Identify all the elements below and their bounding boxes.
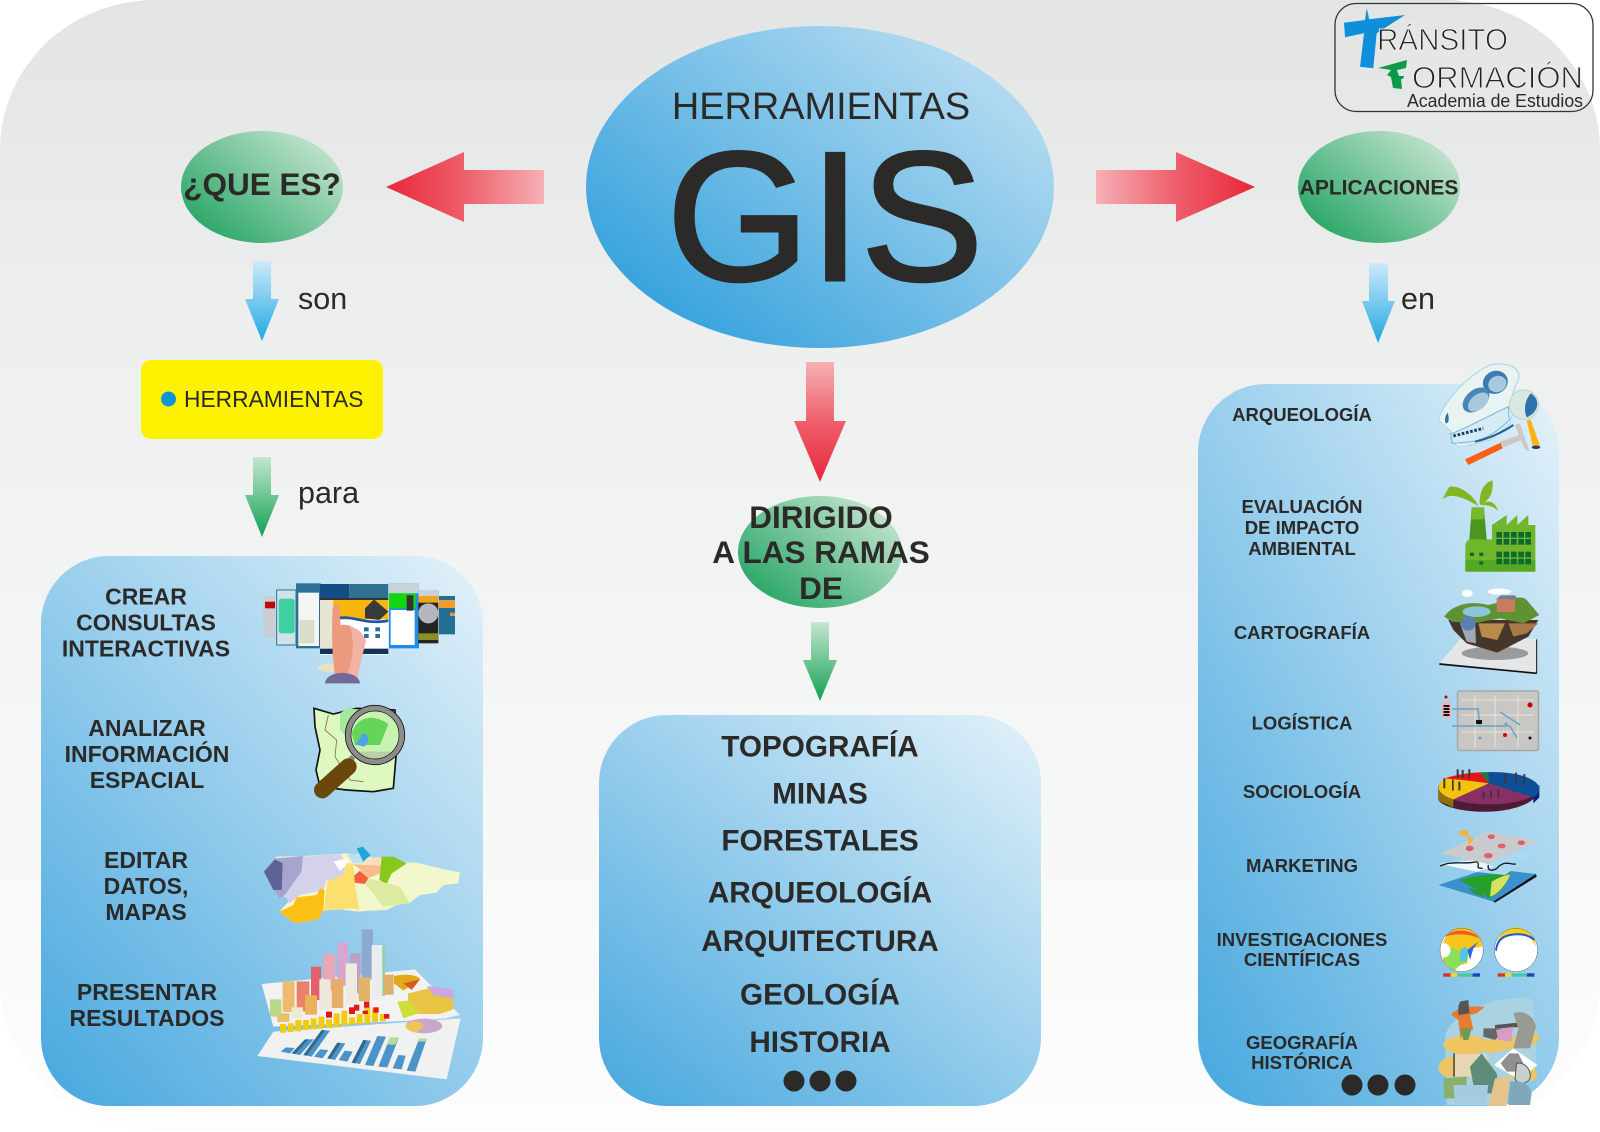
text: evaluación: DE IMPACTO	[1245, 517, 1359, 538]
text: analizar: ESPACIAL	[90, 767, 204, 793]
arrow: down from GIS	[794, 362, 846, 482]
text: analizar: INFORMACIÓN	[65, 740, 229, 767]
icon: 3D pie chart	[1438, 769, 1539, 812]
text: list of branches: GEOLOGÍA	[740, 978, 900, 1012]
text: list of branches: ARQUEOLOGÍA	[708, 876, 932, 910]
text: list of branches: ARQUITECTURA	[701, 925, 939, 958]
box: Herramientas	[141, 360, 383, 439]
text: list of branches: FORESTALES	[721, 824, 919, 858]
text: logística: LOGÍSTICA	[1252, 712, 1352, 734]
ellipse: Aplicaciones: APLICACIONES	[1300, 176, 1458, 200]
ellipse: Que es	[181, 131, 343, 243]
arrow: down to branches	[803, 622, 837, 701]
ellipse: Que es: ¿QUE ES?	[183, 166, 341, 202]
central ellipse: Herramientas GIS: HERRAMIENTAS	[672, 86, 970, 128]
icon: green factory	[1443, 481, 1535, 572]
ellipse: Aplicaciones	[1298, 131, 1460, 243]
arrow: son	[245, 261, 279, 341]
text: geografía: GEOGRAFÍA	[1246, 1032, 1358, 1053]
text: editar: MAPAS	[105, 899, 187, 925]
icon: map layers	[1438, 829, 1539, 903]
ellipse: dirigido a las ramas de: DE	[799, 570, 843, 606]
text: academia de estudios: Academia de Estudios	[1407, 90, 1583, 111]
text: list of branches: MINAS	[772, 778, 868, 810]
text: marketing: MARKETING	[1246, 855, 1358, 876]
text: crear consultas: CONSULTAS	[76, 610, 216, 636]
text: investigaciones: CIENTÍFICAS	[1244, 949, 1360, 970]
label: para: para	[298, 476, 359, 510]
icon: floating land	[1439, 589, 1539, 673]
text: list of branches: TOPOGRAFÍA	[721, 730, 919, 764]
text: evaluación: EVALUACIÓN	[1242, 496, 1362, 517]
dots: more applications	[1342, 1074, 1416, 1096]
text: sociología: SOCIOLOGÍA	[1243, 781, 1361, 802]
text: geografía: HISTÓRICA	[1251, 1052, 1353, 1073]
dots: more	[784, 1070, 856, 1092]
text: presentar: RESULTADOS	[69, 1005, 225, 1031]
icon: map with magnifier	[314, 705, 405, 792]
icon: dinosaur skull	[1438, 364, 1540, 465]
label: en: en	[1401, 282, 1435, 316]
text: analizar: ANALIZAR	[88, 715, 206, 741]
text: presentar: PRESENTAR	[77, 979, 217, 1005]
box: Herramientas: HERRAMIENTAS	[184, 386, 363, 412]
icon: logo F	[1378, 60, 1407, 89]
icon: logistics map	[1442, 691, 1538, 750]
arrow: left to Que es	[386, 152, 544, 222]
panel: para (left)	[41, 556, 483, 1106]
text: editar: EDITAR	[104, 847, 188, 873]
logo: Tránsito Formación	[1335, 4, 1593, 112]
text: crear consultas: CREAR	[105, 584, 187, 610]
ellipse: dirigido a las ramas de	[712, 496, 930, 608]
text: editar: DATOS,	[104, 873, 188, 899]
text: arqueología: ARQUEOLOGÍA	[1232, 404, 1372, 425]
arrow: para	[245, 457, 279, 537]
icon: brain maps	[1440, 927, 1538, 977]
central ellipse: Herramientas GIS	[586, 26, 1054, 348]
ellipse: dirigido a las ramas de: A LAS RAMAS	[712, 534, 930, 570]
icon: regional map	[264, 847, 460, 923]
arrow: en	[1362, 263, 1395, 343]
text: crear consultas: INTERACTIVAS	[62, 636, 230, 662]
text: cartografía: CARTOGRAFÍA	[1234, 622, 1370, 643]
panel: ramas (center)	[599, 715, 1041, 1106]
icon: screens and hand	[263, 583, 455, 683]
label: son: son	[298, 282, 347, 316]
text: investigaciones: INVESTIGACIONES	[1217, 929, 1387, 950]
icon: historical geography collage	[1438, 998, 1539, 1106]
text: list of branches: HISTORIA	[749, 1026, 891, 1059]
text: logo TRANSITO: RÁNSITO	[1377, 22, 1508, 57]
central ellipse: Herramientas GIS: GIS	[667, 113, 983, 319]
panel: aplicaciones (right)	[1198, 364, 1559, 1106]
arrow: right to Aplicaciones	[1096, 152, 1255, 222]
text: logo ORMACION: ORMACIÓN	[1412, 60, 1583, 95]
ellipse: dirigido a las ramas de: DIRIGIDO	[749, 499, 893, 535]
text: evaluación: AMBIENTAL	[1248, 538, 1356, 559]
icon: charts	[257, 929, 461, 1079]
icon: logo T	[1344, 8, 1405, 68]
